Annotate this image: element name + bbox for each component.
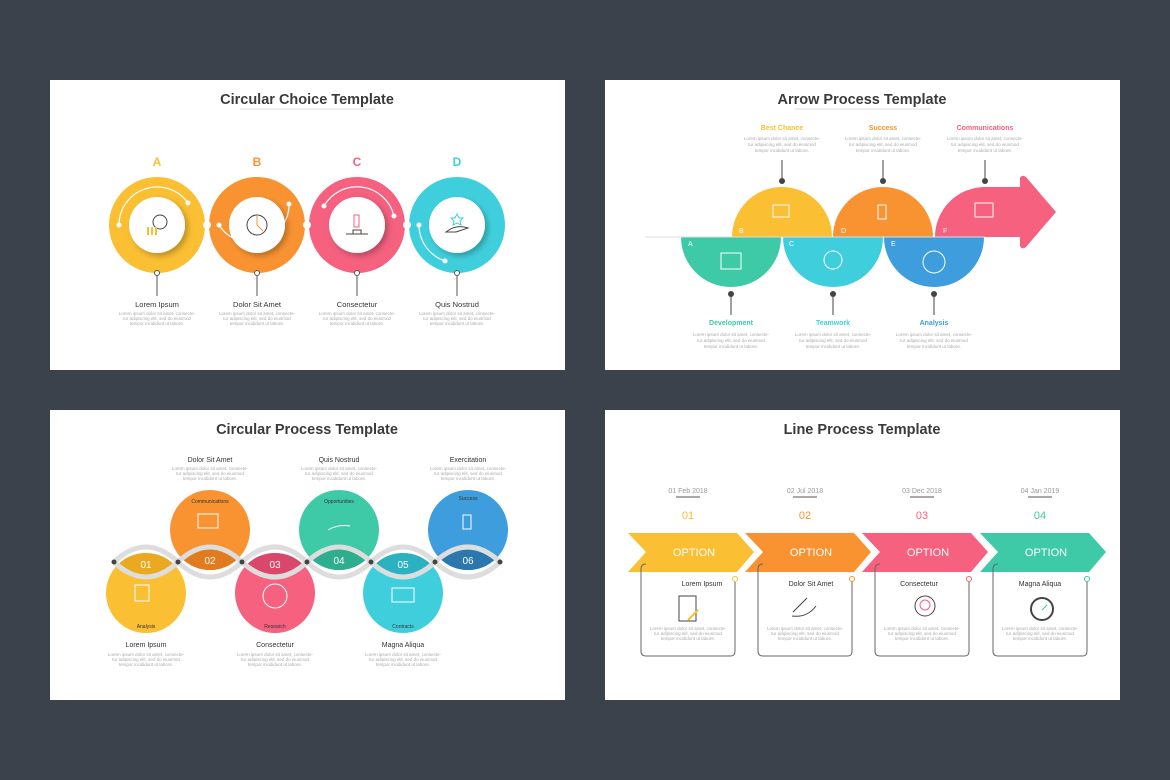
arrow shape: D: [841, 228, 846, 235]
labels: Lorem ipsum dolor sit amet, consecte-: [365, 652, 442, 657]
choice B: B: [253, 155, 262, 169]
choice D: [409, 155, 505, 326]
bottom labels: Analysis: [920, 320, 949, 327]
top labels: tempor incididunt ut labore.: [856, 148, 910, 153]
panel: circular choice: [50, 80, 565, 370]
top labels: tur adipiscing elit, sed do eiusmod: [951, 142, 1019, 147]
dates and numbers: 04 Jan 2019: [1021, 488, 1059, 495]
bottom labels: Lorem ipsum dolor sit amet, consecte-: [896, 332, 973, 337]
panel: line process: tempor incididunt ut labore.: [895, 636, 949, 641]
chevrons: OPTION: [790, 547, 832, 559]
arrow shape: E: [891, 241, 896, 248]
title: circular choice: Circular Choice Template: [220, 92, 394, 108]
labels: Exercitation: [450, 457, 486, 464]
choice D: tur adipiscing elit, sed do eiusmod: [423, 316, 491, 321]
labels: Lorem ipsum dolor sit amet, consecte-: [172, 466, 249, 471]
choice D: Lorem ipsum dolor sit amet, consecte-: [419, 311, 496, 316]
choice C: C: [353, 155, 362, 169]
top labels: [744, 125, 1024, 153]
top labels: Lorem ipsum dolor sit amet, consecte-: [744, 136, 821, 141]
labels: Lorem ipsum dolor sit amet, consecte-: [108, 652, 185, 657]
dates and numbers: 01: [682, 510, 694, 522]
choice C: tur adipiscing elit, sed do eiusmod: [323, 316, 391, 321]
labels: Lorem ipsum dolor sit amet, consecte-: [237, 652, 314, 657]
bottom labels: [693, 320, 973, 349]
panel: line process: Lorem ipsum dolor sit amet, consecte-: [767, 626, 844, 631]
choice B: tur adipiscing elit, sed do eiusmod: [223, 316, 291, 321]
top labels: tur adipiscing elit, sed do eiusmod: [849, 142, 917, 147]
labels: tempor incididunt ut labore.: [312, 476, 366, 481]
circles: Success: [459, 496, 478, 502]
choice D: Quis Nostrud: [435, 300, 479, 309]
choice A: tur adipiscing elit, sed do eiusmod: [123, 316, 191, 321]
dates and numbers: 03: [916, 510, 928, 522]
panel: arrow process: [605, 80, 1120, 370]
choice A: A: [153, 155, 162, 169]
arrow shape: B: [739, 228, 744, 235]
choice A: [109, 155, 205, 326]
top labels: Lorem ipsum dolor sit amet, consecte-: [845, 136, 922, 141]
choice B: Dolor Sit Amet: [233, 300, 282, 309]
top labels: Best Chance: [761, 125, 803, 132]
choice C: [309, 155, 405, 326]
choice B: tempor incididunt ut labore.: [230, 321, 284, 326]
labels: tur adipiscing elit, sed do eiusmod: [112, 657, 180, 662]
chevrons: OPTION: [1025, 547, 1067, 559]
title: line process: Line Process Template: [784, 422, 940, 438]
circles: [106, 490, 508, 633]
labels: tur adipiscing elit, sed do eiusmod: [434, 471, 502, 476]
labels: Magna Aliqua: [382, 642, 424, 649]
chevrons: OPTION: [673, 547, 715, 559]
bottom labels: tur adipiscing elit, sed do eiusmod: [799, 338, 867, 343]
labels: tur adipiscing elit, sed do eiusmod: [241, 657, 309, 662]
panel: line process: Lorem ipsum dolor sit amet, consecte-: [650, 626, 727, 631]
labels: tempor incididunt ut labore.: [248, 662, 302, 667]
labels: Consectetur: [256, 642, 295, 649]
bottom labels: tempor incididunt ut labore.: [704, 344, 758, 349]
chevrons: [628, 533, 1106, 572]
title: arrow process: Arrow Process Template: [778, 92, 946, 108]
choice A: tempor incididunt ut labore.: [130, 321, 184, 326]
labels: Lorem Ipsum: [126, 642, 167, 649]
choice C: Consectetur: [337, 300, 378, 309]
circles: 06: [462, 556, 474, 567]
arrow shape: C: [789, 241, 794, 248]
labels: Quis Nostrud: [319, 457, 360, 464]
circles: 01: [140, 560, 152, 571]
panel: line process: Lorem ipsum dolor sit amet, consecte-: [1002, 626, 1079, 631]
top labels: Communications: [957, 125, 1013, 132]
labels: tur adipiscing elit, sed do eiusmod: [369, 657, 437, 662]
boxes: [641, 564, 1090, 656]
panel: line process: tur adipiscing elit, sed do eiusmod: [771, 631, 839, 636]
dates and numbers: 03 Dec 2018: [902, 488, 942, 495]
panel: line process: tempor incididunt ut labore.: [661, 636, 715, 641]
dates and numbers: 01 Feb 2018: [668, 488, 708, 495]
panel: line process: [605, 410, 1120, 700]
bottom labels: tempor incididunt ut labore.: [806, 344, 860, 349]
bottom labels: Lorem ipsum dolor sit amet, consecte-: [795, 332, 872, 337]
top labels: Success: [869, 125, 897, 132]
bottom labels: Development: [709, 320, 754, 327]
dates and numbers: 04: [1034, 510, 1046, 522]
top labels: tempor incididunt ut labore.: [755, 148, 809, 153]
labels: tur adipiscing elit, sed do eiusmod: [176, 471, 244, 476]
choice B: Lorem ipsum dolor sit amet, consecte-: [219, 311, 296, 316]
top labels: Lorem ipsum dolor sit amet, consecte-: [947, 136, 1024, 141]
circles: Analysis: [137, 624, 156, 630]
choice D: D: [453, 155, 462, 169]
panel: line process: tur adipiscing elit, sed do eiusmod: [1006, 631, 1074, 636]
circles: 02: [204, 556, 216, 567]
chevrons: OPTION: [907, 547, 949, 559]
choice C: Lorem ipsum dolor sit amet, consecte-: [319, 311, 396, 316]
labels: tempor incididunt ut labore.: [376, 662, 430, 667]
panel: line process: Consectetur: [900, 581, 939, 588]
bottom labels: tur adipiscing elit, sed do eiusmod: [900, 338, 968, 343]
title: circular process: Circular Process Template: [216, 422, 398, 438]
top labels: tempor incididunt ut labore.: [958, 148, 1012, 153]
circles: 04: [333, 556, 345, 567]
panel: line process: tur adipiscing elit, sed do eiusmod: [654, 631, 722, 636]
labels: Lorem ipsum dolor sit amet, consecte-: [430, 466, 507, 471]
bottom labels: Teamwork: [816, 320, 850, 327]
labels: [108, 457, 507, 667]
choice A: Lorem Ipsum: [135, 300, 179, 309]
circles: 03: [269, 560, 281, 571]
labels: tempor incididunt ut labore.: [119, 662, 173, 667]
arrow shape: [645, 176, 1056, 287]
choice C: tempor incididunt ut labore.: [330, 321, 384, 326]
arrow shape: A: [688, 241, 693, 248]
labels: tur adipiscing elit, sed do eiusmod: [305, 471, 373, 476]
bottom labels: tur adipiscing elit, sed do eiusmod: [697, 338, 765, 343]
panel: line process: Lorem ipsum dolor sit amet, consecte-: [884, 626, 961, 631]
panel: line process: tempor incididunt ut labore.: [1013, 636, 1067, 641]
dates and numbers: 02 Jul 2018: [787, 488, 823, 495]
dates and numbers: [668, 488, 1059, 522]
panel: circular process: [50, 410, 565, 700]
circles: Communications: [191, 499, 229, 505]
panel: line process: Lorem Ipsum: [682, 581, 723, 588]
circles: Opportunities: [324, 499, 354, 505]
bottom labels: tempor incididunt ut labore.: [907, 344, 961, 349]
bottom labels: Lorem ipsum dolor sit amet, consecte-: [693, 332, 770, 337]
choice B: [209, 155, 305, 326]
panel: line process: Magna Aliqua: [1019, 581, 1061, 588]
arrow shape: F: [943, 228, 947, 235]
labels: Lorem ipsum dolor sit amet, consecte-: [301, 466, 378, 471]
panel: line process: tur adipiscing elit, sed do eiusmod: [888, 631, 956, 636]
circles: Contracts: [392, 624, 414, 630]
panel: line process: Dolor Sit Amet: [789, 581, 833, 588]
top labels: tur adipiscing elit, sed do eiusmod: [748, 142, 816, 147]
choice D: tempor incididunt ut labore.: [430, 321, 484, 326]
choice A: Lorem ipsum dolor sit amet, consecte-: [119, 311, 196, 316]
dates and numbers: 02: [799, 510, 811, 522]
labels: tempor incididunt ut labore.: [183, 476, 237, 481]
panel: line process: tempor incididunt ut labore.: [778, 636, 832, 641]
labels: Dolor Sit Amet: [188, 457, 232, 464]
circles: 05: [397, 560, 409, 571]
circles: Research: [264, 624, 286, 630]
labels: tempor incididunt ut labore.: [441, 476, 495, 481]
